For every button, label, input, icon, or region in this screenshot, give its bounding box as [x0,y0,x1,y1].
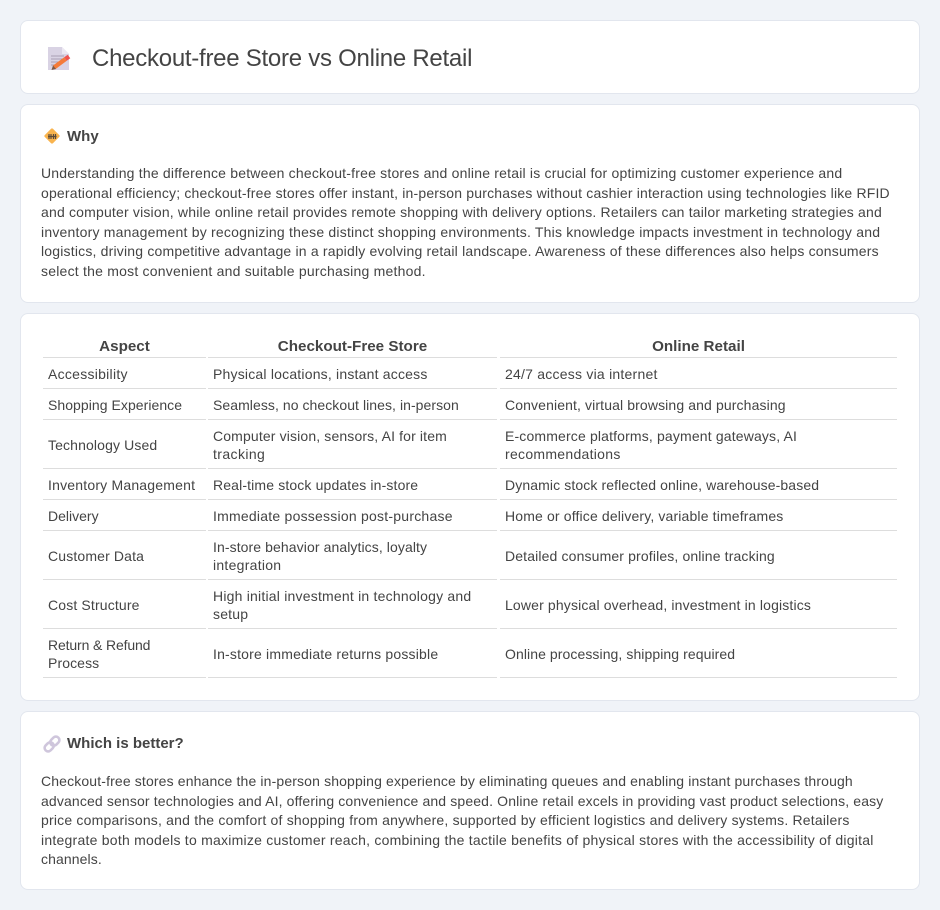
row: accessibility: Physical locations, instant access [213,366,428,382]
row: shopping experience: Convenient, virtual browsing and purchasing [505,397,786,413]
text block: why explanation: inventory management by recognizing these distinct shopping environments. This knowledge impacts investment in technology and [41,224,880,240]
row: accessibility [48,366,658,382]
row: customer data: Detailed consumer profiles, online tracking [505,548,775,564]
row: customer data: In-store behavior analytics, loyalty [213,539,427,555]
text block: verdict: channels. [41,851,102,867]
icon: warning diamond [44,128,60,144]
text block: verdict: advanced sensor technologies and AI, offering convenience and speed. Online retail excels in providing vast product selections, easy [41,793,883,809]
icon: document with pencil [48,47,70,70]
row: delivery: Immediate possession post-purchase [213,508,453,524]
text block: why explanation: select the most convenient and suitable purchasing method. [41,263,426,279]
text block: verdict: Checkout-free stores enhance the in-person shopping experience by eliminating queues and enabling instant purchases through [41,773,853,789]
row: cost structure: Lower physical overhead, investment in logistics [505,597,811,613]
row: delivery: Delivery [48,508,99,524]
row: accessibility: Accessibility [48,366,128,382]
table header [99,338,745,355]
title: Checkout-free Store vs Online Retail [92,45,472,72]
text block: why explanation: Understanding the difference between checkout-free stores and online retail is crucial for optimizing customer experience and [41,165,842,181]
row: return and refund process [48,637,735,671]
text block: verdict: price comparisons, and the comfort of shopping from anywhere, supported by efficient logistics and delivery systems. Retailers [41,812,850,828]
row: technology used: Technology Used [48,437,157,453]
row: return and refund process: Online processing, shipping required [505,646,735,662]
row: technology used: recommendations [505,446,621,462]
text block: why explanation [41,165,890,279]
row: return and refund process: Process [48,655,99,671]
row: technology used: E-commerce platforms, payment gateways, AI [505,428,797,444]
panel: title header [20,20,920,94]
row: customer data [48,539,775,573]
text block: why explanation: and computer vision, while online retail provides remote shopping with delivery options. Retailers can tailor marketing strategies and [41,204,882,220]
table header: Online Retail [652,338,745,355]
row: inventory management: Dynamic stock reflected online, warehouse-based [505,477,819,493]
row: inventory management: Inventory Management [48,477,195,493]
text block: verdict [41,773,884,867]
table header: Aspect [99,338,150,355]
row: cost structure [48,588,811,622]
row: inventory management [48,477,819,493]
table header: Checkout-Free Store [278,338,427,355]
row: cost structure: setup [213,606,248,622]
row: technology used: tracking [213,446,265,462]
row: technology used [48,428,797,462]
row: accessibility: 24/7 access via internet [505,366,658,382]
icon: chain link [43,735,61,753]
row: delivery: Home or office delivery, variable timeframes [505,508,783,524]
text block: why explanation: logistics, driving competitive advantage in a rapidly evolving retail landscape. Awareness of these differences also helps consumers [41,243,879,259]
row: technology used: Computer vision, sensors, AI for item [213,428,447,444]
row: return and refund process: In-store immediate returns possible [213,646,438,662]
panel: which is better [20,711,920,890]
heading: which is better: Which is better? [67,735,184,752]
row: return and refund process: Return & Refund [48,637,150,653]
panel: why [20,104,920,303]
heading: why: Why [67,128,99,145]
row: shopping experience: Seamless, no checkout lines, in-person [213,397,459,413]
text block: why explanation: operational efficiency; checkout-free stores offer instant, in-person purchases without cashier interaction using technologies like RFID [41,185,890,201]
panel: comparison table [20,313,920,701]
row: cost structure: Cost Structure [48,597,140,613]
row: customer data: Customer Data [48,548,144,564]
row: shopping experience: Shopping Experience [48,397,182,413]
row: shopping experience [48,397,786,413]
text block: verdict: integrate both models to maximize customer reach, combining the tactile benefits of physical stores with the accessibility of digital [41,832,874,848]
row: delivery [48,508,783,524]
row: inventory management: Real-time stock updates in-store [213,477,418,493]
row: customer data: integration [213,557,281,573]
row: cost structure: High initial investment in technology and [213,588,471,604]
